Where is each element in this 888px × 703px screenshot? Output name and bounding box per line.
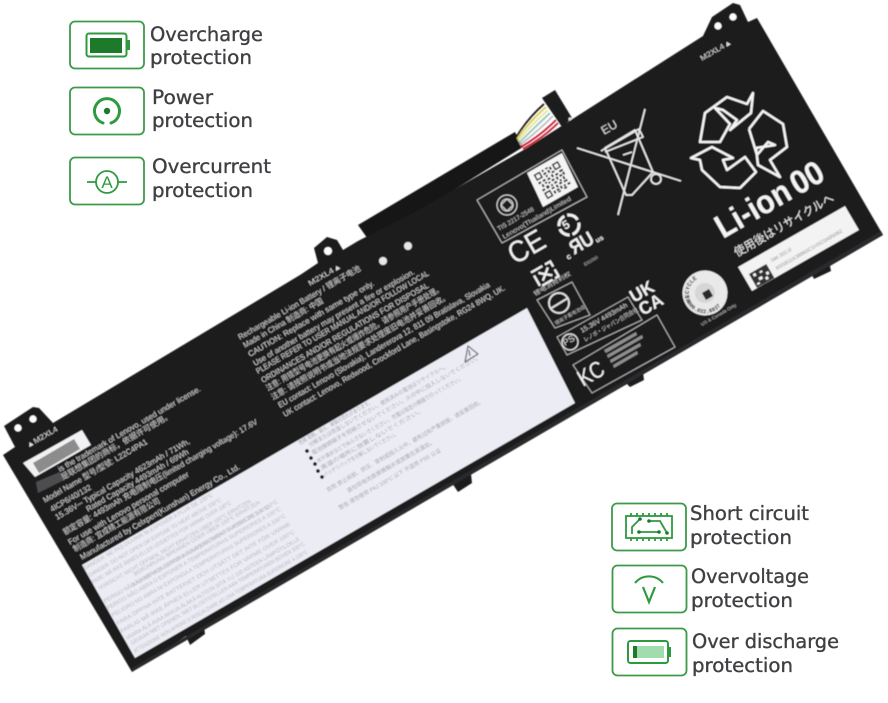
EU weee symbol: EU (598, 117, 620, 138)
UKCA mark (626, 277, 667, 319)
model codes: M2XL4▲ (306, 261, 343, 288)
icon: ammeter (87, 171, 127, 193)
left text block: is the trademark of Lenovo, used under license. (56, 384, 202, 474)
feature: power protection: protection (152, 109, 253, 132)
Japanese and Chinese warnings: 警告 请勿使用 PAJ 100°C 以下 不适用 PSE 认证 (337, 446, 443, 512)
middle text block: 注意: 请按照说明书或当地法规要求处理废旧电池并妥善回收。 (269, 291, 451, 402)
feature: short circuit protection: protection (690, 526, 792, 549)
multilingual warnings (83, 493, 309, 655)
middle text block: Rechargeable Li-ion Battery / 锂离子电池 (236, 263, 362, 342)
certification box with QR: TIS 2217-2548 (496, 206, 536, 233)
icon: circuit chip (626, 513, 672, 541)
multilingual warnings: NÃO ABRA OU EXPONHA A AQUECIMENTO ACIMA DE 100°C (130, 504, 271, 589)
recycle seal: 1.800.822.8837 (684, 295, 720, 314)
Japanese and Chinese warnings: 電池接続端子を短絡させないでください。火の中に投入しないでください。 (310, 353, 482, 457)
multilingual warnings: PERIGO NÃO ABRIR NEM EXPOR A TEMPERATURAS SUPERIORES A 100°C (102, 499, 279, 605)
voltage box (557, 297, 642, 355)
Japanese and Chinese warnings: 危険 発熱、発火、破裂の恐れがあります。 (297, 398, 374, 447)
UL mark: ЯU (566, 228, 598, 259)
recycling arrows (691, 93, 787, 188)
feature: overcharge protection: Overcharge (150, 23, 263, 46)
voltage box: PS (561, 333, 576, 348)
feature: over discharge protection: Over discharge (692, 630, 839, 653)
certification box with QR (477, 150, 587, 243)
Japanese and Chinese warnings: 分解または改造しないでください。使用済みの電池はリサイクルへ。 (307, 362, 450, 449)
left text block: Rated Capacity 4493mAh / 69Wh (84, 447, 190, 514)
date sticker: Date: 2022.10 (770, 247, 793, 264)
li-ion label: Li-ion 00 (708, 153, 830, 245)
middle text block: ORDINANCES AND/OR REGULATIONS FOR DISPOSAL (260, 281, 431, 385)
UL mark: c (564, 251, 573, 262)
feature: short circuit protection: Short circuit (690, 502, 809, 525)
KC box: KC (572, 355, 609, 391)
feature: short circuit protection (612, 502, 809, 550)
model codes: ▲M2XL4 (24, 424, 59, 450)
recycling square mark (532, 262, 573, 298)
5 year seal: 5 (560, 217, 573, 233)
icon: low battery (628, 641, 671, 663)
date sticker: 8SSB11K38960C1HSC0A8509Z (775, 229, 844, 272)
feature: over discharge protection: protection (692, 654, 793, 677)
left text block: 4ICP6/40/132 (48, 483, 93, 514)
warning triangle (465, 346, 478, 362)
icon: full battery (86, 34, 130, 56)
feature: overcurrent protection (70, 155, 271, 204)
EU weee symbol (577, 109, 681, 215)
date sticker (738, 206, 859, 291)
recycling square mark: 锂电消费利权 (532, 270, 573, 298)
UL mark: E81090 (583, 255, 599, 267)
left text block: 15.36V⎓ Typical Capacity 4623mAh / 71Wh, (54, 437, 191, 522)
Japanese and Chinese warnings: 危险 禁止拆卸、挤压、穿刺或投入火中，避免过热严重损毁，请妥善回收。 (325, 397, 485, 494)
multilingual warnings: VORSICHT: NICHT ÖFFNEN, NICHT ERHITZEN ÜBER 100°C ERHITZEN (98, 498, 253, 592)
feature: overcurrent protection: protection (152, 179, 253, 202)
left text block: For use with Lenovo personal computer (66, 470, 191, 547)
voltage box: 15.36V 4493mAh (580, 302, 629, 335)
Japanese and Chinese warnings: 水や海水などでぬらさないでください。充電は指定の機器で行ってください。 (315, 374, 464, 465)
japanese recycle note: 使用後はリサイクルへ (731, 190, 836, 260)
icon: voltage arc (635, 576, 663, 602)
multilingual warnings: VAARA ÄLÄ AVAA AKKUA ÄLÄKÄ ALTISTA SITÄ YLI 100 ASTEEN LÄMPÖTILOILLE (124, 536, 301, 642)
recycle seal: RECYCLE (684, 276, 698, 303)
UL mark: us (594, 235, 605, 245)
TIS seal (497, 195, 517, 215)
UKCA mark: UK (626, 277, 658, 306)
certification box with QR: Lenovo(Thailand)Limited (502, 195, 573, 241)
Japanese and Chinese warnings: 高温の場所に放置しないでください。 (319, 406, 425, 472)
bullets (305, 449, 324, 479)
left text block: 额定容量: 4493mAh 充电限制电压(limited charging voltage): 17.6V (61, 416, 260, 537)
middle text block: PLEASE REFER TO USER MANUAL AND/OR FOLLOW LOCAL (254, 269, 431, 376)
multilingual warnings: FARA ÖPPNA INTE BATTERIET OCH UTSÄTT DET INTE FÖR VÄRME (116, 521, 292, 627)
rating seal box: 锂离子蓄电池组 (554, 304, 587, 327)
CE mark: CE (502, 223, 551, 271)
multilingual warnings: PERIGO NÃO ABRA O EXPONER A TEMPERATURAS SUPERIORES A 100°C (106, 506, 282, 612)
multilingual warnings: BERÜHRUNG BRENNEN ODER ÜBER 100°C ERHITZEN (132, 499, 262, 578)
feature: over discharge protection (612, 628, 839, 677)
feature: overcurrent protection: Overcurrent (152, 155, 271, 178)
feature: power protection (70, 86, 253, 134)
multilingual warnings: PELIGRO NO ABRA NI EXPONGA A TEMPERATURAS SUPERIORES A 100°C (111, 514, 287, 619)
QR code (534, 161, 572, 199)
middle text block: EU contact: Lenovo (Slovakia), Landererova 12, 811 09 Bratislava, Slovakia (276, 280, 492, 410)
mounting holes (14, 13, 737, 432)
recycle seal: US & Canada Only (700, 302, 738, 327)
voltage box: レノボ・ジャパン合同会社 (582, 306, 640, 344)
middle text block: UK contact: Lenovo, Redwood, Crockford Lane, Basingstoke, RG24 8WQ, UK. (282, 283, 507, 419)
model codes (24, 37, 733, 450)
feature: overvoltage protection: protection (691, 589, 793, 612)
multilingual warnings: DANGER: NE PAS OUVRIR NI EXPOSER A PLUS DE 100°C (83, 493, 214, 572)
middle text block: 注意: 用错型号电池更换有起火或爆炸危险。请参照用户手册处理。 (264, 283, 444, 393)
icon: power ring (94, 99, 119, 123)
middle text block: Made in China 制造商: 中国 (241, 296, 325, 350)
recycle seal (682, 270, 738, 327)
UKCA mark: CA (635, 290, 667, 319)
left text block (41, 384, 260, 562)
multilingual warnings: FARE: MÅ IKKE ÅBNES ELLER UDSÆTTES FOR VARME OVER 100°C (90, 500, 233, 586)
UL mark (564, 228, 605, 267)
left text block: 制造商: 宜成精工能源有限公司 (71, 496, 162, 554)
feature: overvoltage protection: Overvoltage (691, 565, 809, 588)
feature: overvoltage protection (612, 565, 809, 612)
left text block: Model Name 型号/型號: L22C4PA1 (41, 436, 150, 505)
left text block: Manufactured by Celxpert(Kunshan) Energy Co., Ltd. (78, 462, 241, 562)
Japanese and Chinese warnings: 请勿将电池直接接触水或放置在高温处。 (345, 437, 436, 495)
model codes: M2XL4▲ (698, 37, 733, 63)
middle text block: CAUTION: Replace with same type only. (246, 279, 376, 359)
multilingual warnings: FARLIG MÅ IKKE ÅPNES ELLER UTSETTES FOR VARME OVER 100°C (120, 529, 296, 635)
icon: ammeter: A (101, 173, 113, 192)
rating seal box (537, 282, 590, 328)
middle text block: Use of another battery may present a fire or explosion. (252, 267, 416, 368)
multilingual warnings: ATTENZIONE NON APRIRE O RISCALDARE AD UNA TEMPERATURA SUPERIORE A 100°C (133, 550, 309, 655)
Japanese and Chinese warnings: バッテリパックを分解しないでください。 (322, 429, 400, 479)
multilingual warnings: GEVAAR NIET OPENEN, NIET BLOOTSTELLEN AAN TEMPERATUREN BOVEN 100°C (130, 542, 306, 647)
KC box (572, 315, 675, 393)
Japanese and Chinese warnings (297, 353, 485, 512)
multilingual warnings: DANGER: DO NOT OPEN OR EXPOSE TO HEAT ABOVE 100°C (88, 498, 223, 579)
feature: overcharge protection (70, 22, 263, 69)
left text block: 是联想集团的商标，依据许可使用。 (59, 410, 173, 482)
flat cable (358, 90, 572, 242)
feature: overcharge protection: protection (150, 46, 252, 69)
white warning panel (82, 308, 575, 658)
5 year seal (559, 215, 579, 235)
serial sticker (23, 430, 91, 493)
feature: power protection: Power (152, 86, 213, 109)
